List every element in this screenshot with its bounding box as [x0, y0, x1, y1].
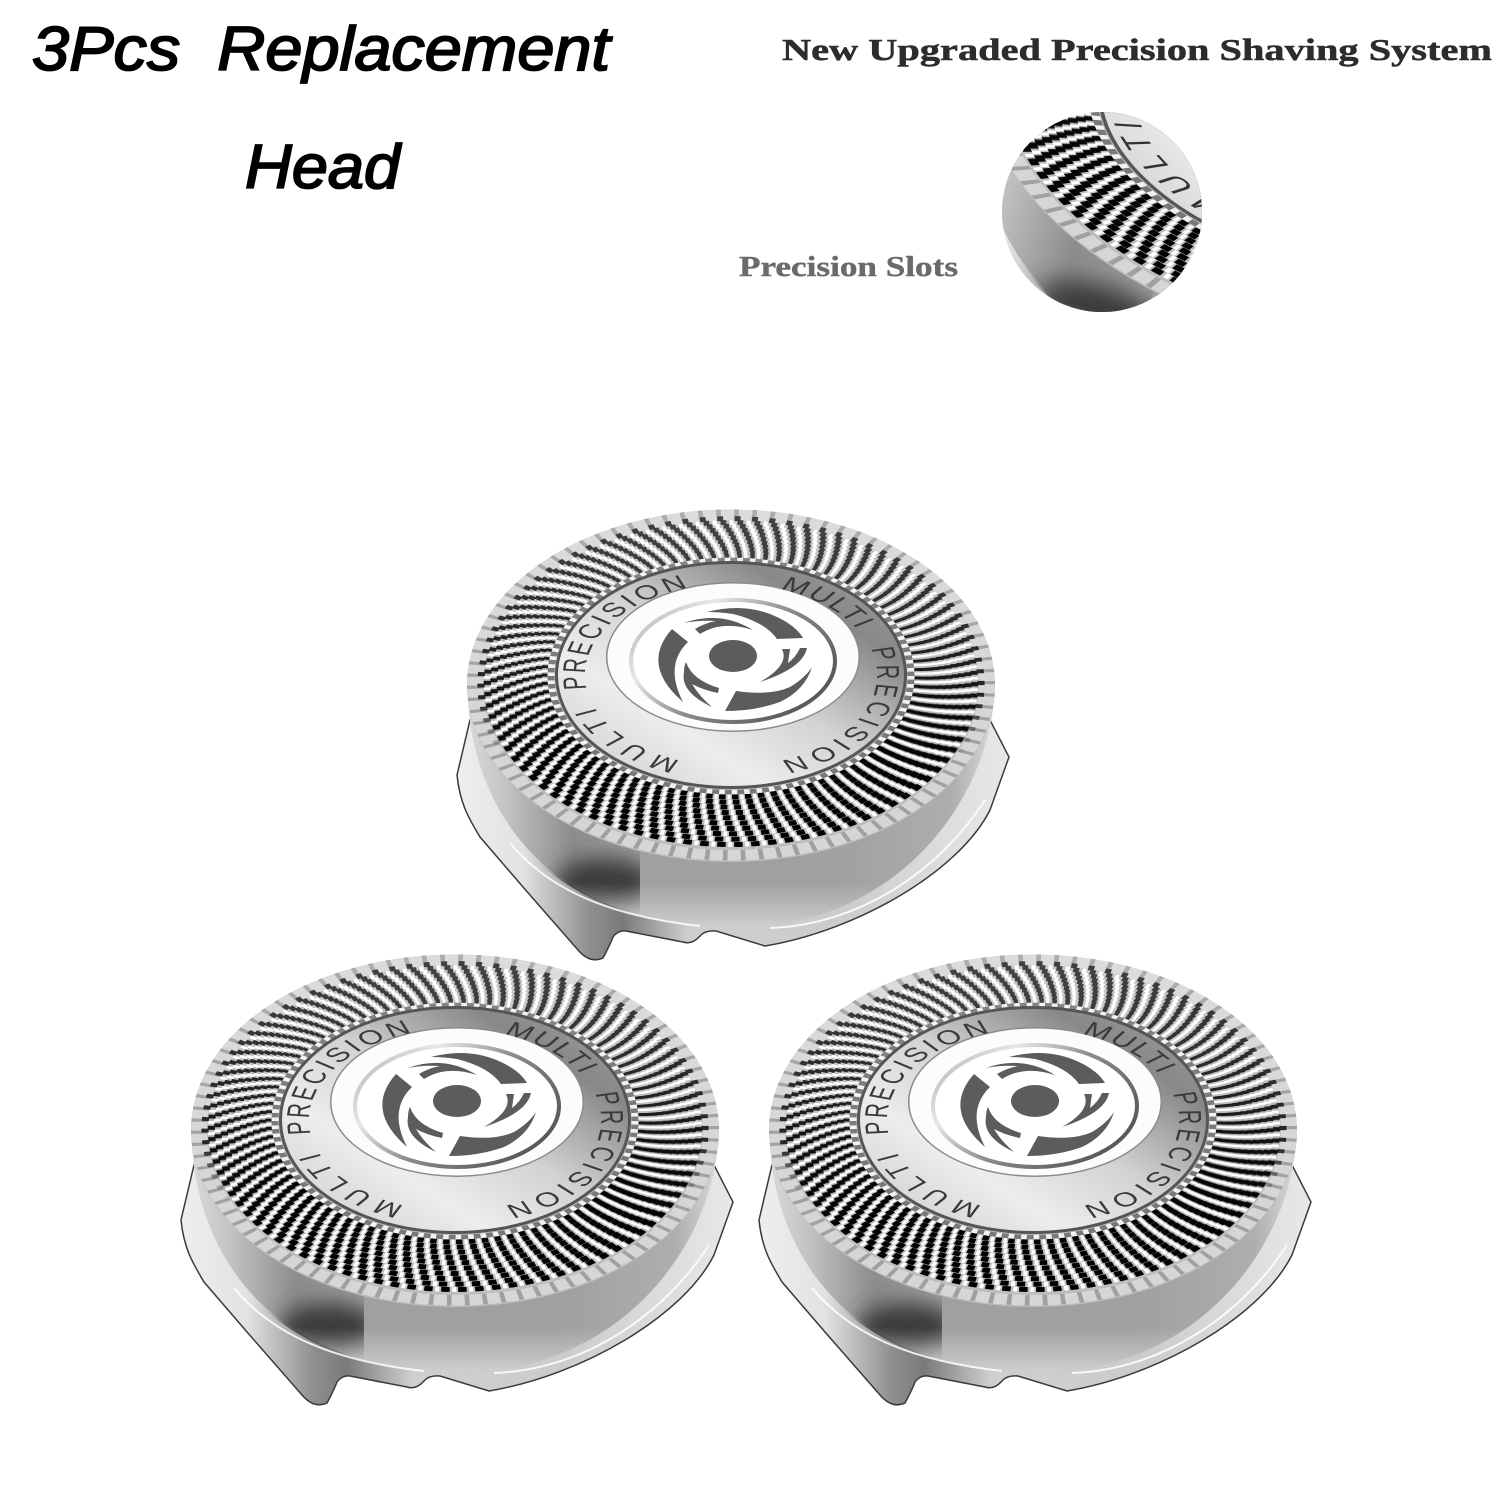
- title: 3Pcs Replacement: [32, 15, 613, 84]
- engraved ring text: bottom left: MULTI: [299, 1154, 402, 1218]
- inset: zoomed shaver head detail: MULTI: [1114, 123, 1202, 208]
- engraved ring text: bottom right: [865, 1020, 1201, 1218]
- engraved ring text: bottom left: PRECISION: [507, 1092, 623, 1218]
- engraved ring text: bottom right: MULTI: [1084, 1022, 1176, 1072]
- engraved ring text: top: MULTI: [575, 709, 678, 773]
- label: precision slots: Precision Slots: [739, 252, 958, 283]
- engraved ring text: bottom left: MULTI: [506, 1022, 598, 1072]
- engraved ring text: top: MULTI: [782, 576, 874, 628]
- engraved ring text: bottom right: PRECISION: [865, 1020, 988, 1134]
- engraved ring text: bottom right: PRECISION: [1085, 1092, 1201, 1218]
- engraved ring text: top: [563, 575, 899, 773]
- title: [32, 15, 613, 202]
- shaver head: bottom right: [758, 954, 1312, 1406]
- head body: top: [457, 510, 1009, 960]
- engraved ring text: bottom right: MULTI: [877, 1154, 980, 1218]
- title: Head: [245, 133, 403, 202]
- subtitle: precision shaving system: New Upgraded Precision Shaving System: [782, 32, 1492, 67]
- engraved ring text: bottom left: [287, 1020, 623, 1218]
- shaver head: top: [456, 510, 1010, 961]
- engraved ring text: top: PRECISION: [783, 647, 899, 773]
- engraved ring text: bottom left: PRECISION: [287, 1020, 410, 1134]
- head body: bottom left: [181, 955, 733, 1405]
- engraved ring text: top: PRECISION: [563, 575, 686, 689]
- inset: zoomed shaver head detail: PRECISION: [1098, 0, 1302, 140]
- head body: bottom right: [759, 955, 1311, 1405]
- shaver head: bottom left: [180, 954, 734, 1406]
- inset: zoomed shaver head detail: [1002, 112, 1202, 312]
